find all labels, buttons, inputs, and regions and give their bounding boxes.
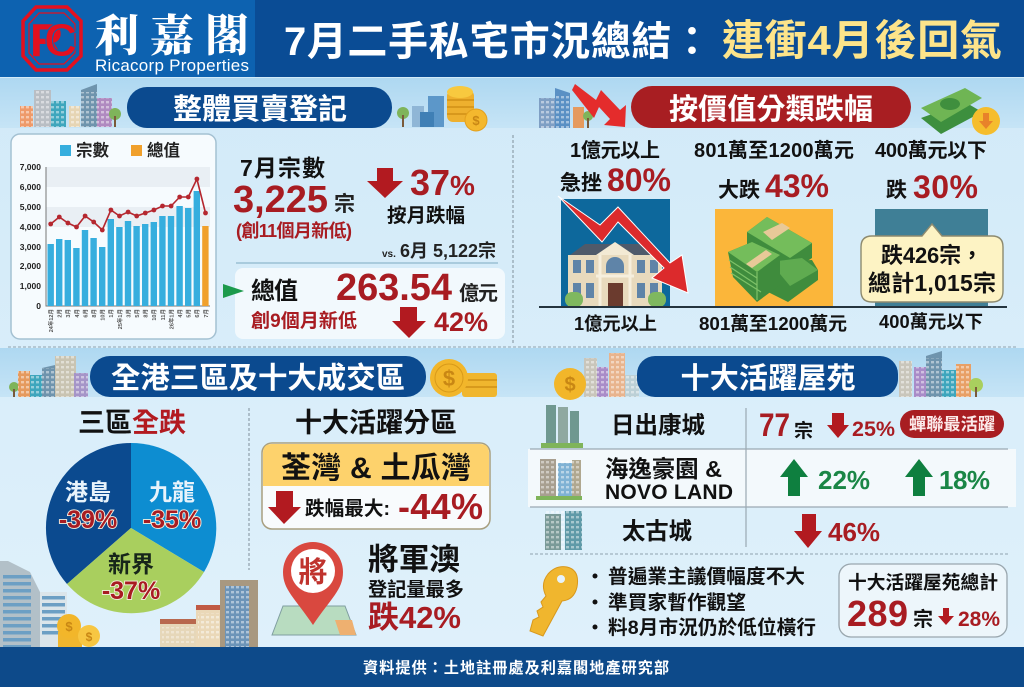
- combo chart: transactions and value: 2月: [57, 309, 64, 318]
- stat: monthly drop 37%: 6月 5,122宗: [400, 240, 496, 261]
- header bar: [0, 0, 1024, 77]
- chart card: [11, 134, 216, 339]
- header decoration: coins: $: [472, 113, 480, 128]
- combo chart: transactions and value: 26年1月: [167, 309, 175, 329]
- chart legend: [60, 140, 180, 160]
- decoration: buildings lower right: [160, 580, 258, 647]
- column: 8.01M to 12M: 43%: [765, 168, 829, 204]
- row: Sunrise City: 77: [759, 407, 790, 443]
- stat: July count: (創11個月新低): [236, 220, 352, 241]
- column: above 100M: [558, 139, 688, 307]
- stat: monthly drop 37%: 37%: [410, 162, 475, 203]
- bullet notes: 準買家暫作觀望: [608, 591, 746, 614]
- row: Sunrise City: [541, 405, 1004, 448]
- section heading pill: 按價值分類跌幅: [669, 93, 873, 126]
- combo chart: transactions and value: 7月: [203, 309, 210, 318]
- combo chart: transactions and value: 10月: [151, 309, 158, 321]
- bullet notes: 普遍業主議價幅度不大: [608, 565, 805, 588]
- column axis labels: [574, 311, 983, 334]
- icon: towers: [536, 459, 582, 500]
- panel: top ten estates: [528, 351, 1016, 639]
- combo chart: transactions and value: 5月: [186, 309, 193, 318]
- stat: July count: 3,225: [233, 179, 328, 221]
- stat box: total: [839, 564, 1007, 637]
- combo chart: transactions and value: 2,000: [20, 261, 41, 271]
- callout bubble: 總計1,015宗: [868, 270, 996, 296]
- icon: map pin: 將: [298, 556, 328, 589]
- column axis labels: 1億元以上: [574, 314, 657, 334]
- column: under 4M: 400萬元以下: [875, 139, 987, 162]
- pie chart: three regions: 港島: [65, 479, 111, 505]
- pie chart: three regions: [46, 443, 216, 613]
- combo chart: transactions and value: 1月: [108, 309, 115, 318]
- decoration: buildings and coins lower left: $: [65, 619, 73, 634]
- panel: three regions and top districts: [0, 356, 497, 647]
- combo chart: transactions and value: 5,000: [20, 202, 41, 212]
- subheading: top ten districts: 十大活躍分區: [295, 408, 457, 438]
- combo chart: transactions and value: 4月: [74, 309, 81, 318]
- column: above 100M: 1億元以上: [570, 139, 660, 162]
- pointer triangle: [223, 284, 244, 298]
- stat box: total value: 億元: [459, 282, 498, 305]
- row: Taikoo Shing: 46%: [828, 517, 880, 547]
- decoration: buildings and coins lower left: $: [86, 630, 93, 644]
- stat box: total: 十大活躍屋苑總計: [848, 572, 998, 593]
- combo chart: transactions and value: 1,000: [20, 281, 41, 291]
- section heading pill: [127, 87, 392, 128]
- stat box: total: 28%: [958, 608, 1000, 631]
- row: Hampton / Novo Land: 18%: [939, 465, 990, 495]
- row: Sunrise City: 日出康城: [611, 411, 706, 438]
- combo chart: transactions and value: 4月: [177, 309, 184, 318]
- stat box: total value: [223, 267, 505, 339]
- combo chart: transactions and value: 6,000: [20, 182, 41, 192]
- combo chart: transactions and value: 8月: [91, 309, 98, 318]
- stat: Tseung Kwan O: 將軍澳: [368, 542, 460, 577]
- panel: price segment declines: [539, 84, 1007, 334]
- combo chart: transactions and value: 3月: [125, 309, 132, 318]
- callout bubble: 跌426宗，: [881, 243, 983, 268]
- callout: Tsuen Wan and To Kwa Wan: -44%: [398, 486, 483, 527]
- badge: most active consecutive: [900, 410, 1004, 438]
- chart legend: 總值: [147, 140, 180, 160]
- combo chart: transactions and value: 3月: [65, 309, 72, 318]
- stat: Tseung Kwan O: 跌42%: [368, 600, 461, 635]
- column: 8.01M to 12M: 大跌: [718, 179, 760, 202]
- badge: most active consecutive: 蟬聯最活躍: [909, 414, 995, 434]
- bullet notes: 料8月市況仍於低位橫行: [608, 616, 816, 639]
- column: 8.01M to 12M: 801萬至1200萬元: [694, 139, 854, 162]
- pie chart: three regions: -35%: [143, 506, 201, 534]
- pie chart: three regions: 新界: [108, 551, 154, 577]
- column: under 4M: 30%: [913, 169, 978, 205]
- panel: overall registrations: [11, 84, 505, 339]
- stat: Tseung Kwan O: [368, 542, 464, 635]
- row: Hampton / Novo Land: NOVO LAND: [605, 481, 733, 504]
- header decoration: cash: [921, 88, 1000, 135]
- header decoration: coins: [430, 359, 497, 397]
- column: under 4M: 跌: [886, 179, 907, 202]
- column axis labels: 801萬至1200萬元: [699, 313, 847, 334]
- section heading pill: 全港三區及十大成交區: [111, 362, 405, 395]
- callout: Tsuen Wan and To Kwa Wan: 跌幅最大:: [305, 498, 390, 520]
- title: 連衝4月後回氣: [722, 17, 1002, 64]
- column axis labels: 400萬元以下: [879, 311, 983, 332]
- stat box: total: 宗: [913, 607, 933, 631]
- header decoration: buildings: [9, 356, 88, 397]
- section heading pill: 十大活躍屋苑: [680, 362, 856, 395]
- footer: 資料提供：土地註冊處及利嘉閣地產研究部: [363, 659, 669, 677]
- stat: monthly drop 37%: [367, 162, 496, 261]
- row: Taikoo Shing: 太古城: [622, 517, 692, 544]
- header decoration: buildings: [20, 84, 121, 127]
- stat: July count: 宗: [334, 192, 355, 216]
- icon: towers: [541, 405, 583, 448]
- icon: map pin: [272, 542, 356, 635]
- chart legend: 宗數: [76, 140, 110, 160]
- stat: July count: 7月宗數: [240, 155, 325, 181]
- stat: Tseung Kwan O: 登記量最多: [368, 578, 464, 601]
- stat: July count: [233, 155, 355, 241]
- section heading pill: [637, 356, 898, 397]
- callout: Tsuen Wan and To Kwa Wan: [262, 443, 490, 529]
- row: Sunrise City: 25%: [852, 417, 895, 441]
- stat box: total value: 創9個月新低: [251, 309, 357, 332]
- combo chart: transactions and value: 24年12月: [47, 309, 55, 332]
- header decoration: building and falling arrow: [539, 84, 626, 128]
- header decoration: coin and buildings: $: [564, 374, 576, 396]
- combo chart: transactions and value: 5月: [134, 309, 141, 318]
- column: under 4M: [861, 139, 1003, 307]
- stat box: total: 289: [847, 593, 908, 634]
- section heading pill: [631, 86, 911, 128]
- logo: Ricacorp emblem: [23, 7, 81, 70]
- combo chart: transactions and value: 6月: [194, 309, 201, 318]
- row: Taikoo Shing: [545, 511, 880, 550]
- callout bubble: [861, 224, 1003, 302]
- combo chart: transactions and value: 0: [36, 301, 41, 311]
- footer: [0, 647, 1024, 687]
- logo wordmark: 利嘉閣: [95, 12, 249, 61]
- section heading pill: 整體買賣登記: [173, 93, 347, 126]
- column: above 100M: 急挫: [560, 172, 602, 195]
- stat box: total value: 263.54: [336, 267, 452, 309]
- row: Hampton / Novo Land: [536, 455, 990, 504]
- callout: Tsuen Wan and To Kwa Wan: 荃灣 & 土瓜灣: [281, 452, 471, 485]
- combo chart: transactions and value: 25年1月: [116, 309, 124, 329]
- pie chart: three regions: -39%: [59, 506, 117, 534]
- header decoration: coin and buildings: [554, 353, 639, 400]
- combo chart: transactions and value: 7,000: [20, 162, 41, 172]
- stat box: total value: 總值: [251, 278, 298, 305]
- combo chart: transactions and value: 6月: [82, 309, 89, 318]
- decoration: buildings and coins lower left: [0, 561, 100, 647]
- combo chart: transactions and value: 8月: [143, 309, 150, 318]
- icon: towers: [545, 511, 582, 550]
- combo chart: transactions and value: 11月: [160, 309, 167, 320]
- column: above 100M: 80%: [607, 162, 671, 198]
- stat: monthly drop 37%: vs.: [382, 249, 396, 260]
- illustration: cash stacks: [715, 209, 833, 307]
- row: Hampton / Novo Land: 22%: [818, 465, 870, 495]
- header decoration: buildings: [899, 351, 983, 397]
- row: Sunrise City: 宗: [794, 419, 813, 442]
- logo wordmark: Ricacorp Properties: [95, 56, 249, 75]
- logo: Ricacorp emblem: R: [30, 14, 63, 66]
- icon: key: [530, 567, 578, 636]
- pie chart: three regions: -37%: [102, 577, 160, 605]
- stat: monthly drop 37%: 按月跌幅: [387, 204, 465, 227]
- illustration: mansion with falling arrow: [558, 196, 688, 307]
- combo chart: transactions and value: 3,000: [20, 242, 41, 252]
- logo: Ricacorp emblem: C: [44, 14, 77, 66]
- title: 7月二手私宅市況總結：: [284, 20, 712, 64]
- header decoration: coins: $: [443, 366, 455, 391]
- title: [284, 17, 1002, 64]
- combo chart: transactions and value: [20, 162, 210, 332]
- pie chart: three regions: 九龍: [149, 479, 195, 505]
- combo chart: transactions and value: 4,000: [20, 222, 41, 232]
- header decoration: coins: [397, 86, 487, 131]
- combo chart: transactions and value: 10月: [100, 309, 107, 321]
- stat box: total value: 42%: [434, 307, 488, 337]
- column: 8.01M to 12M: [694, 139, 854, 307]
- bullet notes: [592, 565, 816, 639]
- row: Hampton / Novo Land: 海逸豪園 &: [605, 455, 722, 482]
- subheading: three regions all fall: 三區全跌: [78, 408, 186, 438]
